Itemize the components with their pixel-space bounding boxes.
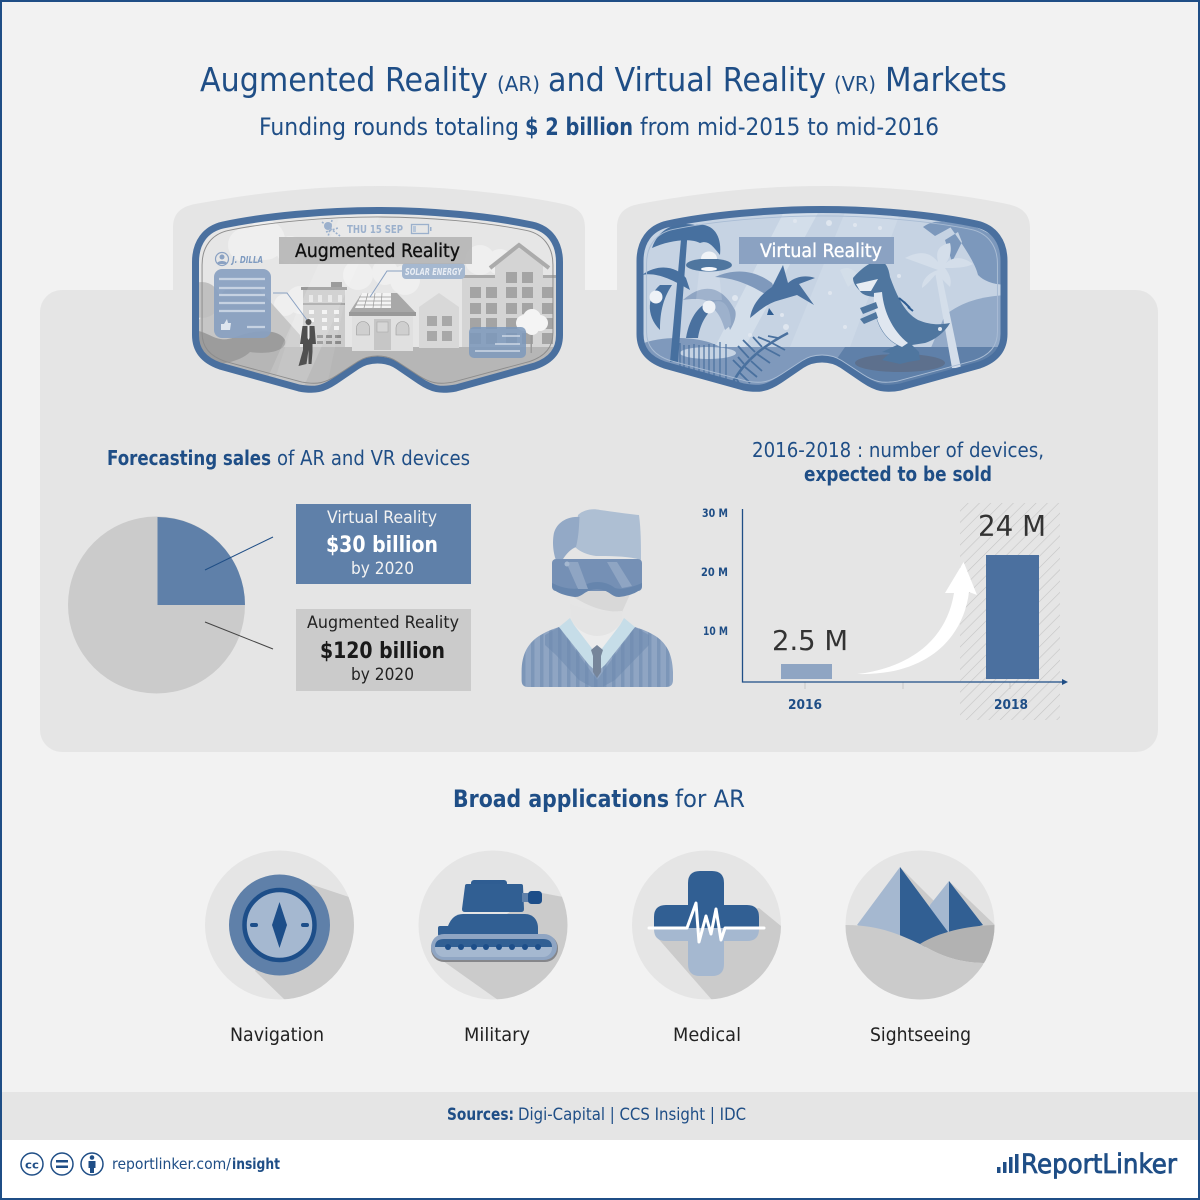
callout: virtual reality value (296, 504, 471, 584)
callout: virtual reality value: by 2020 (351, 559, 414, 578)
bar 2018 (986, 555, 1039, 679)
icon: creative commons licence (21, 1153, 103, 1175)
callout: augmented reality value: by 2020 (351, 665, 414, 684)
x axis labels (788, 697, 1028, 713)
sources band: Digi-Capital | CCS Insight | IDC (518, 1105, 746, 1124)
left palm (642, 224, 720, 362)
heading: forecasting sales: Forecasting sales (107, 446, 271, 470)
tall building (462, 245, 557, 347)
heading: broad applications: Broad applications (453, 785, 669, 813)
ufo (686, 252, 732, 300)
axes (742, 509, 1062, 682)
palm, pale (905, 243, 973, 368)
middle house (419, 293, 459, 348)
title (200, 60, 1007, 99)
label: virtual reality (739, 237, 894, 264)
light reflection (269, 282, 347, 385)
heading: devices sold (752, 438, 1044, 486)
title: and Virtual Reality (548, 60, 826, 99)
icon: person wearing headset (522, 509, 673, 690)
sources band (2, 1092, 1198, 1140)
x axis labels: 2016 (788, 697, 822, 713)
callout: augmented reality value (296, 609, 471, 691)
panel: grey backdrop with goggle tabs (40, 186, 1158, 752)
fern (680, 333, 788, 388)
pterodactyl (715, 265, 815, 318)
heading: broad applications: for AR (675, 785, 745, 813)
small palm (683, 289, 736, 338)
callout: virtual reality value: $30 billion (326, 533, 438, 558)
label: virtual reality: Virtual Reality (760, 241, 882, 262)
icon: creative commons licence: cc (25, 1158, 39, 1172)
y axis labels (701, 506, 728, 638)
icon: sightseeing pyramids (845, 850, 1000, 1005)
solar energy tag (402, 263, 465, 279)
inner outline (202, 217, 553, 383)
icon: medical cross (632, 850, 781, 1000)
t-rex (853, 260, 950, 364)
ground (224, 347, 554, 386)
callout: augmented reality value: $120 billion (320, 639, 445, 664)
tree (516, 309, 548, 353)
footer (2, 1140, 1198, 1198)
heading: forecasting sales: of AR and VR devices (277, 446, 470, 470)
date and battery status (322, 220, 432, 237)
businessman figure (298, 319, 316, 366)
subtitle (259, 113, 939, 141)
value labels: 2.5 M (772, 625, 848, 657)
y axis labels: 30 M (702, 506, 728, 520)
label: augmented reality: Augmented Reality (295, 241, 460, 262)
brochure card (469, 327, 526, 358)
heading: forecasting sales (107, 446, 470, 470)
user tag (216, 252, 263, 266)
callout lines (273, 271, 403, 320)
title: Augmented Reality (200, 60, 488, 99)
callout: augmented reality value: Augmented Reality (307, 613, 459, 632)
reflection bands (716, 213, 818, 347)
subtitle: $ 2 billion (525, 113, 633, 141)
url: reportlinker.com/ (112, 1155, 232, 1173)
bar chart: devices (701, 503, 1068, 720)
title: Markets (885, 60, 1007, 99)
callout: virtual reality value: Virtual Reality (327, 508, 437, 527)
right hill (931, 296, 1000, 347)
goggle: virtual reality (635, 200, 1010, 395)
url: insight (232, 1155, 280, 1173)
icon: military tank (418, 850, 568, 1000)
heading: devices sold: 2016-2018 : number of devices, (752, 438, 1044, 462)
subtitle: from mid-2015 to mid-2016 (640, 113, 939, 141)
glowing orbs (650, 290, 716, 314)
x axis labels: 2018 (994, 697, 1028, 713)
dinosaur shadow (855, 354, 945, 372)
bar 2016 (781, 664, 832, 679)
hatched highlight (960, 503, 1060, 720)
label: medical: Medical (673, 1024, 741, 1046)
icon: navigation compass (205, 850, 354, 1000)
goggle: augmented reality (184, 205, 565, 395)
logo: reportlinker: ReportLinker (1021, 1149, 1178, 1180)
heading: devices sold: expected to be sold (804, 462, 992, 486)
user tag: J. DILLA (231, 255, 263, 266)
info card with thumb (214, 269, 271, 338)
mountain and mound (199, 282, 554, 386)
inner outline (647, 216, 997, 382)
label: military: Military (464, 1024, 530, 1046)
sources band: Sources: (447, 1105, 514, 1124)
solar energy tag: SOLAR ENERGY (405, 267, 463, 278)
title: (AR) (497, 72, 540, 96)
growth arrow (857, 562, 977, 674)
bar chart: devices: 24 M (978, 510, 1046, 543)
y axis labels: 20 M (701, 565, 728, 579)
house with solar roof (349, 293, 416, 351)
ground band (720, 347, 845, 385)
label: navigation: Navigation (230, 1024, 324, 1046)
water and island (680, 347, 736, 359)
label: sightseeing: Sightseeing (870, 1024, 971, 1046)
apartment building (301, 282, 347, 347)
subtitle: Funding rounds totaling (259, 113, 519, 141)
upper right palm (923, 222, 1000, 284)
date and battery status: THU 15 SEP (347, 224, 403, 236)
star dots (732, 219, 942, 337)
y axis labels: 10 M (703, 624, 728, 638)
pie chart (68, 516, 273, 694)
title: (VR) (834, 72, 876, 96)
